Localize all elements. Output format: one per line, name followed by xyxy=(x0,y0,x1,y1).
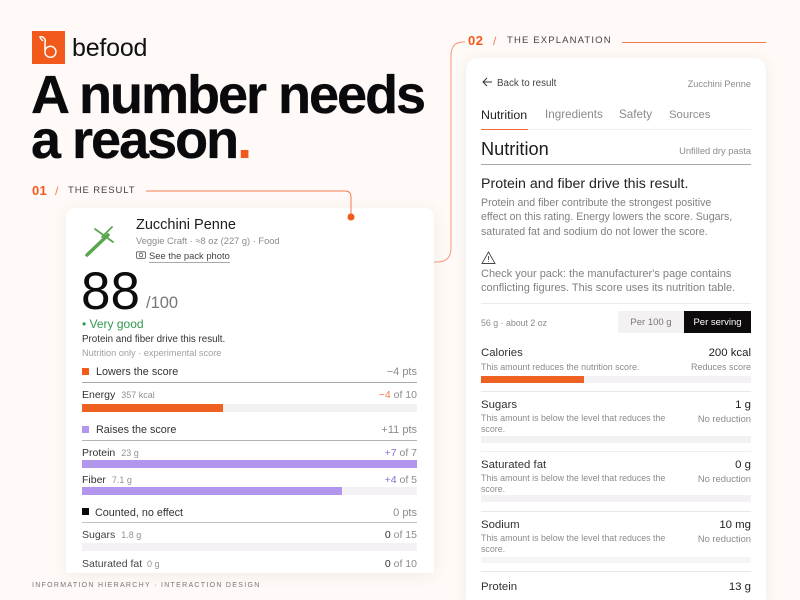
explanation text: saturated fat and sodium do not lower the score. xyxy=(481,226,708,238)
group: counted, no effect: 0 of 10 xyxy=(385,558,417,570)
row: sugars: score. xyxy=(481,424,505,434)
row: sugars: 1 g xyxy=(735,399,751,411)
row: sugars: This amount is below the level that reduces the xyxy=(481,413,665,423)
group: counted, no effect xyxy=(82,507,417,570)
group: lowers the score: Lowers the score xyxy=(96,366,178,378)
row: protein xyxy=(481,581,751,593)
row: saturated fat: This amount is below the level that reduces the xyxy=(481,473,665,483)
group: lowers the score: −4 pts xyxy=(387,366,417,378)
brand name: befood xyxy=(72,34,147,62)
toggle xyxy=(618,311,751,333)
icon: back arrow xyxy=(482,78,492,86)
section label: 02 the explanation xyxy=(468,33,612,48)
row: sodium: Sodium xyxy=(481,519,520,531)
tabs: Sources xyxy=(669,109,710,121)
group: raises the score: +4 of 5 xyxy=(385,474,417,486)
group: lowers the score: Energy 357 kcal xyxy=(82,389,155,401)
group: raises the score: Fiber 7.1 g xyxy=(82,474,132,486)
legend swatch xyxy=(82,426,89,433)
row: sodium: score. xyxy=(481,544,505,554)
serving size: 56 g · about 2 oz xyxy=(481,318,547,328)
section label: 01 the result xyxy=(32,183,135,198)
back link: Back to result xyxy=(497,78,556,89)
explanation text: Protein and fiber contribute the strongest positive xyxy=(481,197,711,209)
row: sodium xyxy=(481,519,751,563)
fiber bar xyxy=(82,487,417,495)
row: saturated fat: 0 g xyxy=(735,459,751,471)
score maximum: /100 xyxy=(146,294,178,312)
explanation text: effect on this rating. Energy lowers the score. Sugars, xyxy=(481,211,732,223)
row: saturated fat: No reduction xyxy=(698,473,751,484)
row: sugars: Sugars xyxy=(481,399,517,411)
explanation heading: Protein and fiber drive this result. xyxy=(481,176,688,192)
panel: result card xyxy=(66,208,434,573)
row: calories: Calories xyxy=(481,347,523,359)
toggle: Per serving xyxy=(693,317,742,328)
warning text xyxy=(481,268,735,294)
section subtitle: Unfilled dry pasta xyxy=(679,146,751,156)
group: counted, no effect: Saturated fat 0 g xyxy=(82,558,160,570)
panel: explanation card xyxy=(466,58,766,600)
footer caption: INFORMATION HIERARCHY · INTERACTION DESIGN xyxy=(32,582,261,589)
toggle: Per 100 g xyxy=(630,317,672,328)
row: sodium: No reduction xyxy=(698,533,751,544)
group: counted, no effect: Sugars 1.8 g xyxy=(82,529,141,541)
sugars bar xyxy=(82,543,417,551)
row: saturated fat xyxy=(481,459,751,502)
tabs xyxy=(481,108,751,130)
icon: warning xyxy=(481,251,496,264)
product name: Zucchini Penne xyxy=(688,79,751,89)
title: a reason. xyxy=(31,110,250,170)
section label: 01 the result: / xyxy=(55,184,58,198)
group: raises the score: Raises the score xyxy=(96,424,176,436)
product meta: Veggie Craft · ≈8 oz (227 g) · Food xyxy=(136,236,280,246)
row: sugars: No reduction xyxy=(698,413,751,424)
group: counted, no effect: 0 pts xyxy=(393,507,417,519)
warning text: Check your pack: the manufacturer's page contains xyxy=(481,268,731,280)
group: raises the score: Protein 23 g xyxy=(82,447,139,459)
tabs: Nutrition xyxy=(481,108,527,122)
summary: Protein and fiber drive this result. xyxy=(82,334,225,345)
warning text: conflicting figures. This score uses its nutrition table. xyxy=(481,282,735,294)
score: 88 xyxy=(81,262,140,321)
pack photo link: See the pack photo xyxy=(149,250,230,261)
row: saturated fat: Saturated fat xyxy=(481,459,546,471)
row: calories: 200 kcal xyxy=(709,347,751,359)
icon: befood mark xyxy=(32,31,65,64)
row: protein: 13 g xyxy=(729,581,751,593)
row: sodium: 10 mg xyxy=(719,519,751,531)
group: raises the score: +7 of 7 xyxy=(385,447,417,459)
protein bar xyxy=(82,460,417,468)
energy bar xyxy=(82,404,417,412)
rating: • Very good xyxy=(82,317,144,331)
group: counted, no effect: 0 of 15 xyxy=(385,529,417,541)
section label: 02 the explanation: 02 xyxy=(468,33,483,48)
row: calories: Reduces score xyxy=(691,362,751,372)
tabs: Safety xyxy=(619,108,652,121)
row: protein: Protein xyxy=(481,581,517,593)
tabs: Ingredients xyxy=(545,108,603,121)
row: sodium: This amount is below the level that reduces the xyxy=(481,533,665,543)
group: lowers the score: −4 of 10 xyxy=(379,389,417,401)
title: A number needs xyxy=(31,65,424,125)
group: lowers the score xyxy=(82,366,417,412)
group: counted, no effect: Counted, no effect xyxy=(95,507,183,519)
legend swatch xyxy=(82,368,89,375)
row: calories xyxy=(481,347,751,383)
note: Nutrition only · experimental score xyxy=(82,348,221,358)
row: sugars xyxy=(481,399,751,443)
section heading: Nutrition xyxy=(481,139,549,159)
group: raises the score xyxy=(82,424,417,495)
icon: zucchini xyxy=(85,226,114,257)
group: raises the score: +11 pts xyxy=(381,424,417,436)
section label: 01 the result: THE RESULT xyxy=(68,185,135,196)
product name: Zucchini Penne xyxy=(136,217,236,233)
row: calories: This amount reduces the nutrition score. xyxy=(481,362,639,372)
title xyxy=(31,65,424,170)
row: saturated fat: score. xyxy=(481,484,505,494)
explanation text xyxy=(481,197,732,238)
section label: 02 the explanation: THE EXPLANATION xyxy=(507,35,612,46)
legend swatch xyxy=(82,508,89,515)
logo xyxy=(32,31,147,64)
section label: 02 the explanation: / xyxy=(493,34,496,48)
icon: camera xyxy=(136,251,146,259)
section label: 01 the result: 01 xyxy=(32,183,47,198)
